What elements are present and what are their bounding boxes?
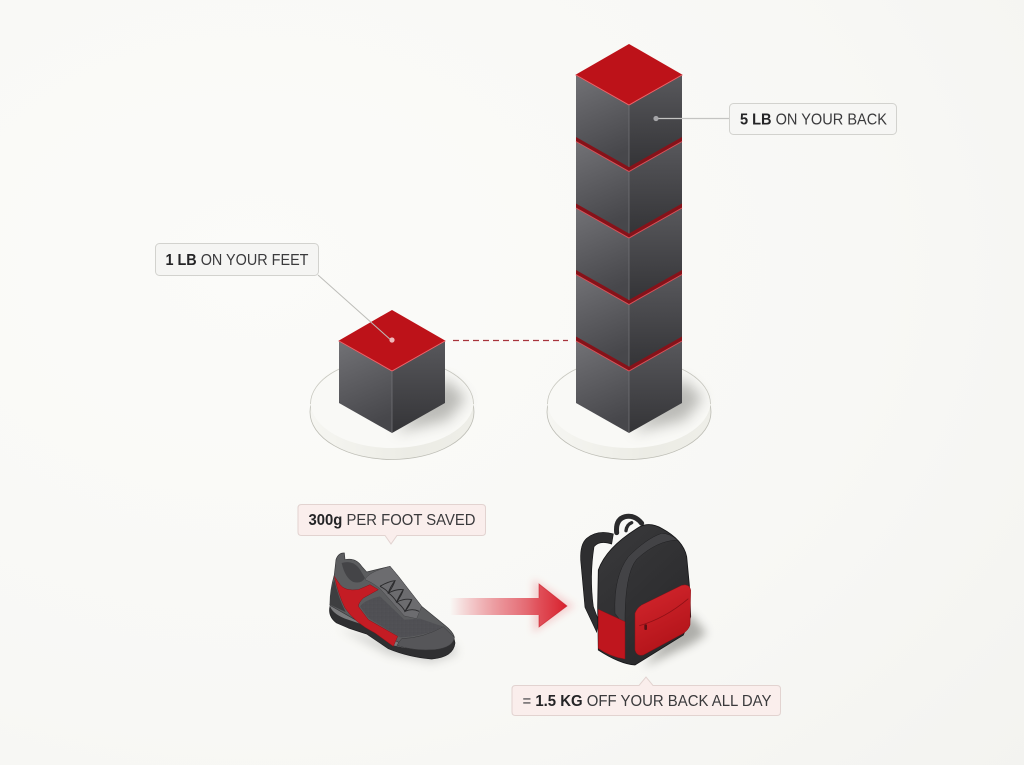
shoe heel panel bbox=[330, 580, 346, 612]
platform: small cube bbox=[310, 356, 474, 460]
shoe shadow bbox=[338, 628, 457, 663]
backpack top handle bbox=[617, 516, 642, 533]
backpack gusset bbox=[615, 533, 677, 627]
shoe laces bbox=[380, 581, 419, 611]
shoe lace panel bbox=[365, 566, 422, 619]
backpack pocket zipper bbox=[639, 599, 688, 626]
backpack red base bbox=[598, 609, 625, 659]
cube 2 bbox=[576, 107, 682, 234]
cube 4 bbox=[576, 240, 682, 366]
icon: trail shoe bbox=[329, 553, 457, 663]
dashed comparison line bbox=[453, 340, 568, 342]
cube 1 (top) bbox=[576, 44, 682, 167]
label: 1.5 kg off your back all day bbox=[512, 677, 780, 716]
label: 1.5 kg off your back all day: = 1.5 KG OFF YOUR BACK ALL DAY bbox=[522, 693, 772, 710]
backpack body bbox=[598, 525, 691, 665]
cube 3 bbox=[576, 174, 682, 300]
shoe outsole bbox=[330, 606, 455, 659]
shoe midsole bbox=[329, 604, 405, 648]
label: 300g per foot saved bbox=[298, 504, 486, 544]
label: 5 lb on your back bbox=[730, 104, 896, 134]
small cube: 1 lb bbox=[339, 310, 466, 433]
icon: backpack bbox=[581, 516, 707, 667]
shoe mesh panel bbox=[360, 596, 443, 637]
shoe red panel bbox=[334, 576, 398, 646]
arrow bbox=[450, 579, 575, 633]
label: 5 lb on your back: 5 LB ON YOUR BACK bbox=[740, 112, 888, 128]
backpack shoulder strap bbox=[581, 532, 613, 632]
shoe toe cap bbox=[397, 627, 454, 650]
shoe upper bbox=[330, 553, 454, 643]
label: 1 lb on your feet: 1 LB ON YOUR FEET bbox=[166, 252, 309, 269]
label: 300g per foot saved: 300g PER FOOT SAVED bbox=[308, 512, 476, 529]
leader line: 1 lb bbox=[318, 275, 395, 343]
leader line: 5 lb bbox=[653, 116, 730, 121]
cube 5 (bottom) bbox=[576, 299, 682, 433]
shoe collar opening bbox=[342, 562, 365, 582]
tower of five cubes: 5 lb bbox=[576, 44, 703, 433]
platform: tower bbox=[547, 356, 711, 460]
label: 1 lb on your feet bbox=[156, 244, 318, 276]
backpack red pocket bbox=[635, 585, 691, 655]
backpack shadow bbox=[643, 613, 707, 667]
